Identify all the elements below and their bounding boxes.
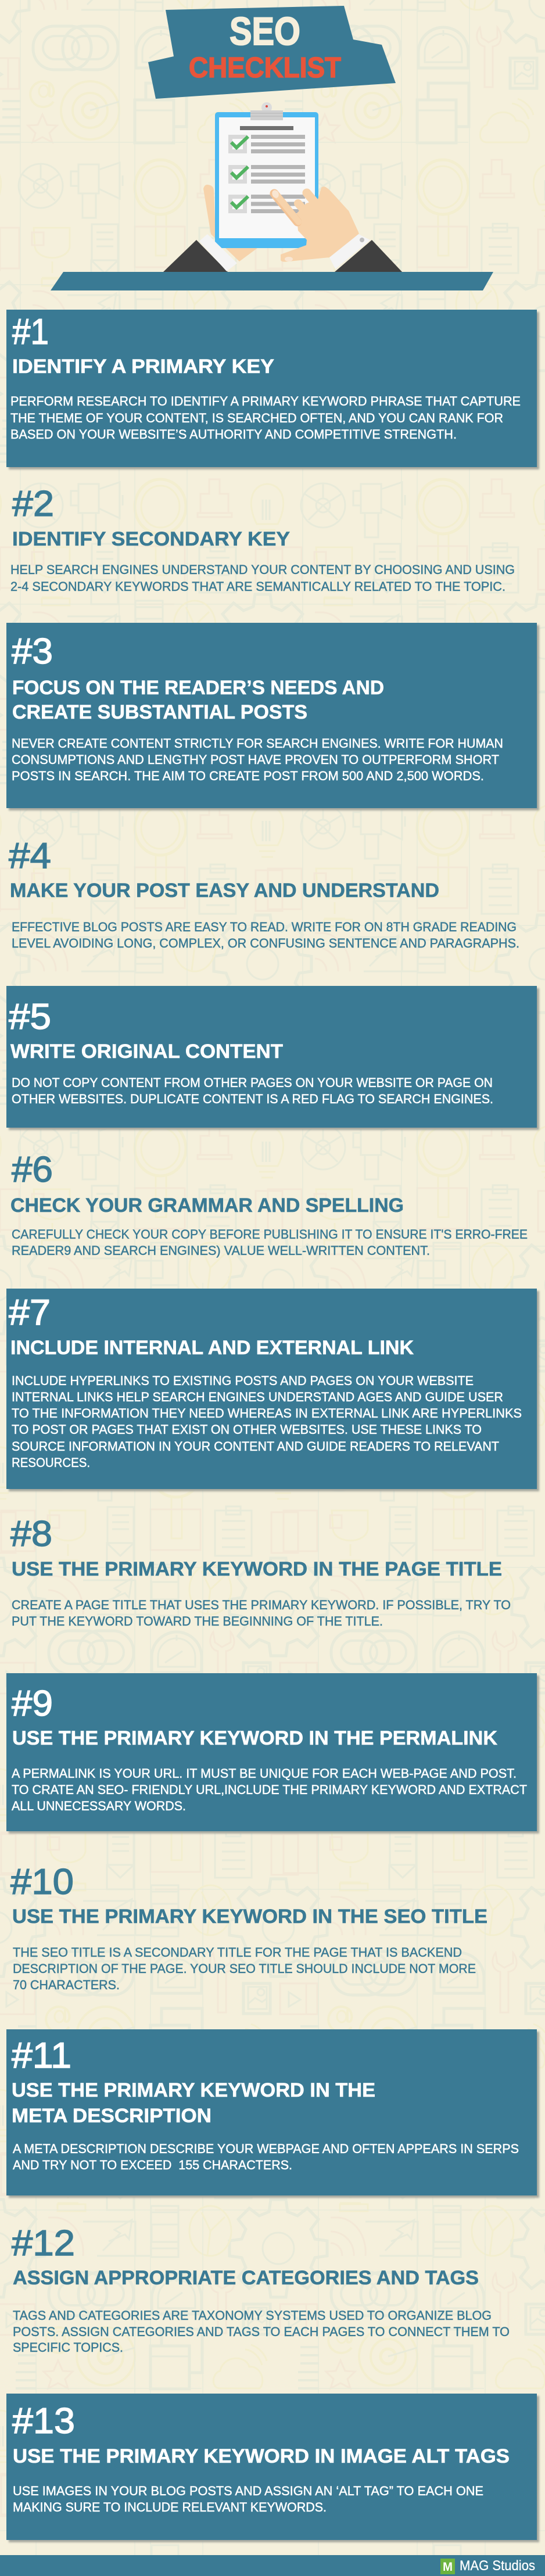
section: #10 keyword in the SEO title: 70 CHARACTERS. xyxy=(13,1978,120,1992)
illustration: hands holding a clipboard checklist xyxy=(163,102,402,272)
panel: #3 focus on the reader's needs: CREATE SUBSTANTIAL POSTS xyxy=(12,701,307,723)
icon: clipboard board xyxy=(215,112,318,248)
panel: #3 focus on the reader's needs: POSTS IN SEARCH. THE AIM TO CREATE POST FROM 500 AND 2,500 WORDS. xyxy=(12,769,484,783)
panel: #3 focus on the reader's needs: #3 xyxy=(12,632,53,672)
footer bar with MAG Studios logo xyxy=(0,2555,545,2576)
title: CHECKLIST: CHECKLIST xyxy=(189,52,341,84)
section: #2 identify secondary key: HELP SEARCH ENGINES UNDERSTAND YOUR CONTENT BY CHOOSING AND USING xyxy=(10,562,515,577)
section: #6 check your grammar: #6 xyxy=(12,1150,53,1190)
icon: clipboard clip xyxy=(250,102,283,120)
panel: #7 internal and external link: RESOURCES. xyxy=(12,1455,90,1470)
title banner xyxy=(148,6,396,99)
section: #6 check your grammar: CHECK YOUR GRAMMAR AND SPELLING xyxy=(10,1194,404,1217)
panel: #11 keyword in the meta description: USE THE PRIMARY KEYWORD IN THE xyxy=(12,2079,375,2101)
checklist item 3 xyxy=(228,195,305,213)
panel: #5 write original content: WRITE ORIGINAL CONTENT xyxy=(10,1041,283,1063)
section: #4 make your post easy: LEVEL AVOIDING LONG, COMPLEX, OR CONFUSING SENTENCE AND PARAGRAPHS. xyxy=(12,936,519,950)
panel: #7 internal and external link: TO THE INFORMATION THEY NEED WHEREAS IN EXTERNAL LINK ARE HYPERLINKS xyxy=(12,1406,522,1420)
panel: #1 identify a primary key: THE THEME OF YOUR CONTENT, IS SEARCHED OFTEN, AND YOU CAN RANK FOR xyxy=(10,411,503,425)
section: #12 categories and tags: POSTS. ASSIGN CATEGORIES AND TAGS TO EACH PAGES TO CONNECT THEM TO xyxy=(13,2324,510,2339)
panel: #7 internal and external link: INCLUDE HYPERLINKS TO EXISTING POSTS AND PAGES ON YOUR WEBSITE xyxy=(12,1373,474,1388)
panel: #3 focus on the reader's needs xyxy=(6,623,539,810)
section: #12 categories and tags: #12 xyxy=(12,2223,75,2263)
panel: #1 identify a primary key: BASED ON YOUR WEBSITE’S AUTHORITY AND COMPETITIVE STRENGTH. xyxy=(10,427,457,442)
section: #4 make your post easy: #4 xyxy=(9,836,51,876)
icon: MAG Studios logo: M xyxy=(443,2560,453,2574)
panel: #11 keyword in the meta description xyxy=(6,2029,539,2198)
icon: right shirt cuff xyxy=(329,234,370,269)
panel: #13 keyword in image alt tags: #13 xyxy=(12,2401,75,2441)
section: #10 keyword in the SEO title xyxy=(10,1862,487,1992)
section: #8 keyword in the page title xyxy=(10,1514,511,1628)
section: #4 make your post easy: MAKE YOUR POST EASY AND UNDERSTAND xyxy=(10,880,439,902)
title: SEO: SEO xyxy=(230,9,300,53)
section: #4 make your post easy: EFFECTIVE BLOG POSTS ARE EASY TO READ. WRITE FOR ON 8TH GRADE READING xyxy=(12,920,517,934)
panel: #9 keyword in the permalink: ALL UNNECESSARY WORDS. xyxy=(12,1799,186,1813)
panel: #11 keyword in the meta description: A META DESCRIPTION DESCRIBE YOUR WEBPAGE AND OFTEN APPEARS IN SERPS xyxy=(13,2141,519,2156)
section: #6 check your grammar: CAREFULLY CHECK YOUR COPY BEFORE PUBLISHING IT TO ENSURE IT'S ERRO-FREE xyxy=(12,1227,528,1242)
checklist item 2 xyxy=(228,165,305,184)
panel: #9 keyword in the permalink xyxy=(6,1673,539,1834)
panel: #11 keyword in the meta description: #11 xyxy=(12,2036,71,2076)
icon: MAG Studios logo xyxy=(440,2559,455,2574)
section: #10 keyword in the SEO title: USE THE PRIMARY KEYWORD IN THE SEO TITLE xyxy=(12,1906,487,1928)
panel: #3 focus on the reader's needs: CONSUMPTIONS AND LENGTHY POST HAVE PROVEN TO OUTPERFORM SHORT xyxy=(12,752,499,767)
checklist heading bar xyxy=(240,126,293,130)
panel: #1 identify a primary key xyxy=(6,310,539,469)
section: #8 keyword in the page title: #8 xyxy=(10,1514,52,1554)
panel: #13 keyword in image alt tags: MAKING SURE TO INCLUDE RELEVANT KEYWORDS. xyxy=(13,2500,327,2514)
icon: left hand xyxy=(203,185,257,261)
banner bar under illustration xyxy=(51,272,493,290)
panel: #5 write original content: OTHER WEBSITES. DUPLICATE CONTENT IS A RED FLAG TO SEARCH ENGINES. xyxy=(12,1092,493,1106)
panel: #5 write original content: DO NOT COPY CONTENT FROM OTHER PAGES ON YOUR WEBSITE OR PAGE ON xyxy=(12,1075,493,1090)
panel: #9 keyword in the permalink: USE THE PRIMARY KEYWORD IN THE PERMALINK xyxy=(12,1727,497,1749)
panel: #7 internal and external link: INTERNAL LINKS HELP SEARCH ENGINES UNDERSTAND AGES AND GUIDE USER xyxy=(12,1390,503,1404)
section: #6 check your grammar xyxy=(10,1150,528,1258)
panel: #11 keyword in the meta description: META DESCRIPTION xyxy=(12,2105,211,2127)
section: #12 categories and tags xyxy=(12,2223,510,2355)
panel: #1 identify a primary key: IDENTIFY A PRIMARY KEY xyxy=(12,356,274,378)
panel: #1 identify a primary key: PERFORM RESEARCH TO IDENTIFY A PRIMARY KEYWORD PHRASE THAT CAPTURE xyxy=(10,394,521,408)
panel: #13 keyword in image alt tags: USE IMAGES IN YOUR BLOG POSTS AND ASSIGN AN ‘ALT TAG” TO EACH ONE xyxy=(13,2484,483,2498)
panel: #9 keyword in the permalink: TO CRATE AN SEO- FRIENDLY URL,INCLUDE THE PRIMARY KEYWORD AND EXTRACT xyxy=(12,1782,527,1797)
section: #12 categories and tags: ASSIGN APPROPRIATE CATEGORIES AND TAGS xyxy=(13,2267,479,2289)
panel: #1 identify a primary key: #1 xyxy=(12,312,49,352)
panel: #5 write original content xyxy=(6,986,539,1130)
section: #4 make your post easy xyxy=(9,836,519,950)
icon: left suit sleeve xyxy=(163,240,228,272)
panel: #5 write original content: #5 xyxy=(9,997,51,1037)
section: #10 keyword in the SEO title: THE SEO TITLE IS A SECONDARY TITLE FOR THE PAGE THAT IS BACKEND xyxy=(13,1945,462,1960)
icon: clipboard paper xyxy=(219,117,315,238)
checklist item 1 xyxy=(228,135,305,153)
section: #2 identify secondary key xyxy=(10,484,515,594)
icon: right hand xyxy=(271,186,359,262)
footer brand name: MAG Studios xyxy=(460,2558,535,2574)
section: #8 keyword in the page title: PUT THE KEYWORD TOWARD THE BEGINNING OF THE TITLE. xyxy=(12,1614,383,1628)
section: #2 identify secondary key: IDENTIFY SECONDARY KEY xyxy=(12,528,290,550)
panel: #13 keyword in image alt tags: USE THE PRIMARY KEYWORD IN IMAGE ALT TAGS xyxy=(13,2445,510,2467)
panel: #13 keyword in image alt tags xyxy=(6,2394,539,2542)
panel: #3 focus on the reader's needs: FOCUS ON THE READER’S NEEDS AND xyxy=(12,677,384,699)
panel: #9 keyword in the permalink: #9 xyxy=(12,1684,53,1724)
panel: #7 internal and external link xyxy=(6,1289,539,1491)
section: #6 check your grammar: READER9 AND SEARCH ENGINES) VALUE WELL-WRITTEN CONTENT. xyxy=(12,1243,430,1258)
section: #2 identify secondary key: 2-4 SECONDARY KEYWORDS THAT ARE SEMANTICALLY RELATED TO THE TOPIC. xyxy=(10,579,505,594)
section: #10 keyword in the SEO title: #10 xyxy=(10,1862,74,1902)
panel: #11 keyword in the meta description: AND TRY NOT TO EXCEED 155 CHARACTERS. xyxy=(13,2158,292,2172)
icon: left shirt cuff xyxy=(199,234,237,271)
panel: #7 internal and external link: SOURCE INFORMATION IN YOUR CONTENT AND GUIDE READERS TO RELEVANT xyxy=(12,1439,499,1454)
icon: right suit sleeve xyxy=(335,240,402,272)
section: #12 categories and tags: TAGS AND CATEGORIES ARE TAXONOMY SYSTEMS USED TO ORGANIZE BLOG xyxy=(13,2308,492,2323)
section: #8 keyword in the page title: CREATE A PAGE TITLE THAT USES THE PRIMARY KEYWORD. IF POSSIBLE, TRY TO xyxy=(12,1598,511,1612)
panel: #9 keyword in the permalink: A PERMALINK IS YOUR URL. IT MUST BE UNIQUE FOR EACH WEB-PAGE AND POST. xyxy=(12,1766,517,1781)
section: #12 categories and tags: SPECIFIC TOPICS. xyxy=(13,2340,123,2355)
section: #10 keyword in the SEO title: DESCRIPTION OF THE PAGE. YOUR SEO TITLE SHOULD INCLUDE NOT MORE xyxy=(13,1961,476,1976)
panel: #7 internal and external link: #7 xyxy=(9,1293,51,1333)
section: #8 keyword in the page title: USE THE PRIMARY KEYWORD IN THE PAGE TITLE xyxy=(12,1558,502,1580)
panel: #3 focus on the reader's needs: NEVER CREATE CONTENT STRICTLY FOR SEARCH ENGINES. WRITE FOR HUMAN xyxy=(12,736,503,751)
panel: #7 internal and external link: TO POST OR PAGES THAT EXIST ON OTHER WEBSITES. USE THESE LINKS TO xyxy=(12,1422,482,1437)
panel: #7 internal and external link: INCLUDE INTERNAL AND EXTERNAL LINK xyxy=(10,1337,414,1359)
section: #2 identify secondary key: #2 xyxy=(12,484,54,524)
